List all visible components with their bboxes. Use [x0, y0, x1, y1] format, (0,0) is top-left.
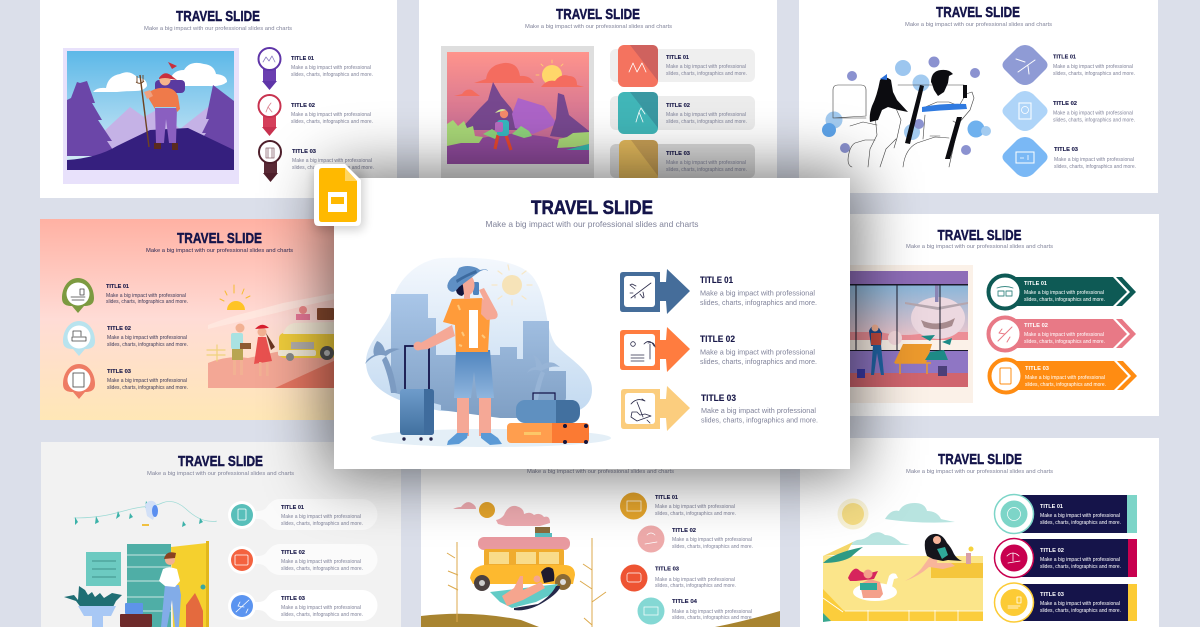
text: title 03: TITLE 03 — [1054, 147, 1079, 153]
icon: diamond passport — [1002, 91, 1048, 131]
text: title 02 — [700, 334, 817, 366]
text: title 02: slides, charts, infographics and more. — [291, 119, 373, 125]
text: title 02: TITLE 02 — [1053, 101, 1077, 107]
icon: red circle — [620, 564, 648, 592]
text: title 01: Make a big impact with professional — [700, 290, 815, 298]
text: title 02: Make a big impact with professional — [107, 335, 187, 341]
icon: Google Slides logo — [314, 164, 364, 230]
text: title 03 — [655, 566, 736, 589]
row: title 03: slides, charts, infographics and more. — [281, 612, 363, 618]
icon: red pin — [258, 95, 280, 136]
text: title 02: Make a big impact with professional — [1053, 110, 1133, 116]
text: title 03: slides, charts, infographics and more. — [1054, 164, 1136, 170]
text: title 01 — [106, 284, 188, 305]
subtitle: slide bottom left: Make a big impact with our professional slides and charts — [147, 471, 294, 477]
illustration: door, person and luggage — [64, 501, 216, 627]
text: title 04 — [672, 599, 753, 621]
subtitle: slide bottom centre: Make a big impact with our professional slides and charts — [527, 469, 674, 475]
text: title 01: TITLE 01 — [106, 284, 130, 290]
bar row: title 01: TITLE 01 — [1040, 504, 1064, 510]
text: title 04: slides, charts, infographics and more. — [672, 615, 753, 621]
text: title 02: TITLE 02 — [700, 334, 735, 344]
text: title 04: Make a big impact with professional — [672, 609, 752, 615]
text: title 01: slides, charts, infographics and more. — [106, 299, 188, 305]
illustration: couple and van — [207, 285, 336, 388]
text: title 03 — [701, 393, 818, 424]
text: title 03: TITLE 03 — [292, 149, 317, 155]
icon: aqua circle — [638, 598, 664, 624]
text: title 04: TITLE 04 — [672, 599, 698, 605]
text: title 03: TITLE 03 — [107, 369, 132, 375]
row: title 01: TITLE 01 — [281, 505, 305, 511]
text: title 01: TITLE 01 — [291, 56, 315, 62]
bar row: title 02 — [994, 538, 1137, 578]
arrow row: title 02 — [988, 318, 1136, 350]
text: title 01 — [1053, 54, 1135, 77]
row: title 02: TITLE 02 — [281, 550, 305, 556]
text: title 01 — [655, 495, 736, 517]
text: title 01: slides, charts, infographics and more. — [291, 72, 373, 78]
text: title 03 — [1054, 147, 1136, 170]
arrow row: title 03: slides, charts, infographics and more. — [1025, 382, 1106, 388]
panel: slide top left, hiker — [40, 0, 397, 198]
arrow icon: sun lounger — [621, 386, 690, 431]
text: title 02: Make a big impact with professional — [291, 112, 371, 118]
text: title 03 — [292, 149, 374, 171]
bar row: title 03 — [994, 583, 1137, 622]
row: title 03 — [610, 140, 755, 182]
icon: pink circle — [638, 526, 664, 552]
panel: slide middle left, road trip couple — [40, 219, 336, 420]
illustration: women at pool — [823, 498, 983, 622]
arrow row: title 03: Make a big impact with professional — [1025, 375, 1105, 381]
text: title 01: Make a big impact with professional — [106, 293, 186, 299]
text: title 01: Make a big impact with professional — [655, 504, 735, 510]
subtitle: slide middle left: Make a big impact with our professional slides and charts — [146, 248, 293, 254]
row: title 03: Make a big impact with professional — [666, 160, 746, 166]
subtitle: slide top centre: Make a big impact with our professional slides and charts — [525, 24, 672, 30]
heading: centre slide: TRAVEL SLIDE — [531, 197, 653, 219]
bar row: title 03: slides, charts, infographics and more. — [1040, 608, 1121, 614]
text: title 03 — [107, 369, 188, 391]
panel: slide middle right, airport — [840, 214, 1159, 416]
row: title 02 — [228, 544, 377, 575]
text: title 01 — [291, 56, 373, 78]
heading: slide middle left: TRAVEL SLIDE — [177, 231, 262, 247]
shadow behind centre slide — [326, 172, 858, 476]
text: title 01: TITLE 01 — [655, 495, 679, 501]
text: title 02: Make a big impact with professional — [700, 350, 815, 356]
row: title 03: slides, charts, infographics and more. — [666, 167, 747, 173]
text: title 02: TITLE 02 — [107, 326, 131, 332]
panel: slide bottom right, pool — [800, 438, 1159, 627]
text: title 01: slides, charts, infographics and more. — [1053, 71, 1135, 77]
arrow row: title 02: Make a big impact with professional — [1024, 332, 1104, 338]
row: title 02: TITLE 02 — [666, 103, 690, 109]
icon: gold circle — [620, 492, 647, 520]
text: title 03: slides, charts, infographics and more. — [655, 583, 736, 589]
text: title 01: Make a big impact with professional — [291, 65, 371, 71]
arrow row: title 03 — [990, 360, 1137, 392]
icon: green badge — [62, 278, 94, 313]
text: title 01 — [700, 275, 817, 307]
heading: slide bottom right: TRAVEL SLIDE — [938, 452, 1022, 468]
text: title 01: slides, charts, infographics and more. — [700, 300, 817, 307]
subtitle: centre slide: Make a big impact with our professional slides and charts — [486, 220, 698, 229]
row: title 01: Make a big impact with professional — [281, 514, 361, 520]
panel: slide bottom left, door — [41, 442, 401, 627]
row: title 01: Make a big impact with professional — [666, 64, 746, 70]
row: title 02: Make a big impact with professional — [281, 559, 361, 565]
panel: slide top centre, mountain walker — [419, 0, 777, 190]
row: title 01: slides, charts, infographics and more. — [281, 521, 363, 527]
text: title 01: TITLE 01 — [700, 275, 733, 285]
subtitle: slide top left: Make a big impact with our professional slides and charts — [144, 26, 292, 32]
text: title 02 — [107, 326, 188, 348]
arrow icon: beach — [620, 327, 690, 372]
text: title 03: Make a big impact with professional — [701, 408, 816, 415]
text: title 02 — [1053, 101, 1135, 124]
row: title 01: TITLE 01 — [666, 55, 690, 61]
icon: diamond plane — [1002, 45, 1048, 85]
illustration: camper van and lounger — [421, 502, 780, 627]
bar row: title 02: slides, charts, infographics and more. — [1040, 564, 1121, 570]
text: title 02 — [291, 103, 373, 125]
illustration: walker and mountains — [441, 46, 594, 178]
row: title 02: Make a big impact with professional — [666, 112, 746, 118]
arrow row: title 01: slides, charts, infographics and more. — [1024, 297, 1105, 303]
text: title 03: TITLE 03 — [655, 566, 680, 572]
row: title 03: Make a big impact with professional — [281, 605, 361, 611]
bar row: title 03: TITLE 03 — [1040, 592, 1065, 598]
illustration: traveller with luggage — [365, 258, 611, 447]
row: title 02: slides, charts, infographics and more. — [281, 566, 363, 572]
text: title 03: Make a big impact with professional — [107, 378, 187, 384]
arrow icon: plane — [620, 269, 690, 314]
row: title 03: TITLE 03 — [281, 596, 306, 602]
icon: purple pin — [258, 48, 280, 90]
text: title 01: Make a big impact with professional — [1053, 64, 1133, 70]
text: title 02: TITLE 02 — [291, 103, 315, 109]
text: title 02 — [672, 528, 753, 550]
text: title 02: slides, charts, infographics and more. — [107, 342, 188, 348]
bar row: title 01 — [994, 494, 1137, 534]
text: title 03: slides, charts, infographics and more. — [701, 418, 818, 424]
bar row: title 01: slides, charts, infographics and more. — [1040, 520, 1121, 526]
text: title 03: Make a big impact with professional — [655, 577, 735, 583]
arrow row: title 02: TITLE 02 — [1024, 323, 1048, 329]
bar row: title 02: Make a big impact with professional — [1040, 557, 1120, 563]
text: title 03: slides, charts, infographics and more. — [107, 385, 188, 391]
heading: slide top centre: TRAVEL SLIDE — [556, 7, 640, 23]
text: title 01: TITLE 01 — [1053, 54, 1077, 60]
icon: blue badge — [63, 321, 95, 356]
bar row: title 03: Make a big impact with professional — [1040, 601, 1120, 607]
subtitle: slide bottom right: Make a big impact with our professional slides and charts — [906, 469, 1053, 475]
text: title 02: slides, charts, infographics and more. — [672, 544, 753, 550]
text: title 02: slides, charts, infographics and more. — [700, 359, 817, 366]
arrow row: title 03: TITLE 03 — [1025, 366, 1050, 372]
row: title 02: slides, charts, infographics and more. — [666, 119, 747, 125]
row: title 03: TITLE 03 — [666, 151, 691, 157]
text: title 02: Make a big impact with professional — [672, 537, 752, 543]
arrow row: title 02: slides, charts, infographics and more. — [1024, 339, 1105, 345]
text: title 03: TITLE 03 — [701, 393, 736, 403]
heading: slide bottom left: TRAVEL SLIDE — [178, 454, 263, 470]
heading: slide top right: TRAVEL SLIDE — [936, 5, 1020, 21]
row: title 01 — [228, 499, 377, 530]
subtitle: slide middle right: Make a big impact with our professional slides and charts — [906, 244, 1053, 250]
illustration: airport window — [840, 265, 973, 403]
heading: slide middle right: TRAVEL SLIDE — [938, 228, 1022, 244]
panel: slide bottom centre, camper van — [421, 460, 780, 627]
illustration: hiker on mountain — [63, 48, 243, 184]
row: title 01: slides, charts, infographics and more. — [666, 71, 747, 77]
bar row: title 01: Make a big impact with professional — [1040, 513, 1120, 519]
text: title 03: Make a big impact with professional — [1054, 157, 1134, 163]
arrow row: title 01 — [988, 276, 1136, 308]
text: title 03: Make a big impact with professional — [292, 158, 372, 164]
row: title 03 — [228, 590, 377, 621]
illustration: passengers on plane — [822, 56, 991, 167]
text: title 02: slides, charts, infographics and more. — [1053, 118, 1135, 124]
arrow row: title 01: Make a big impact with professional — [1024, 290, 1104, 296]
text: title 02: TITLE 02 — [672, 528, 696, 534]
heading: slide top left: TRAVEL SLIDE — [176, 9, 260, 25]
text: title 01: slides, charts, infographics and more. — [655, 511, 736, 517]
row: title 01 — [610, 45, 755, 87]
icon: coral badge — [63, 364, 95, 399]
row: title 02 — [610, 92, 755, 134]
panel: slide top right, plane passengers — [799, 0, 1158, 193]
icon: diamond ticket — [1002, 137, 1048, 177]
bar row: title 02: TITLE 02 — [1040, 548, 1064, 554]
subtitle: slide top right: Make a big impact with our professional slides and charts — [905, 22, 1052, 28]
arrow row: title 01: TITLE 01 — [1024, 281, 1048, 287]
panel: centre slide, traveller — [334, 178, 850, 469]
text: title 03: slides, charts, infographics and more. — [292, 165, 374, 171]
icon: maroon pin — [259, 141, 281, 182]
